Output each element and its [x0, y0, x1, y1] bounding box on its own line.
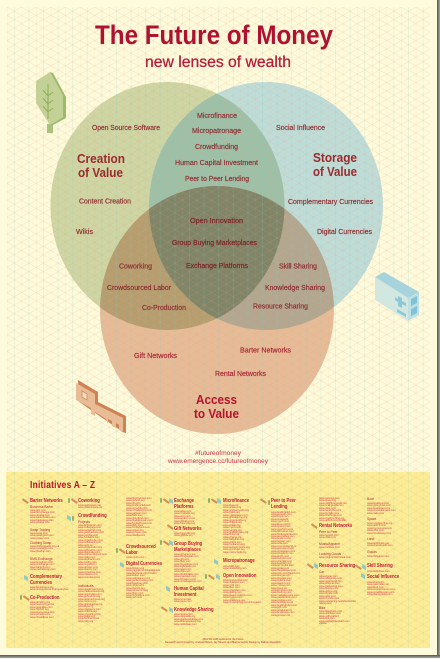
column 2: www.workspace.net www.citizenspace.us: [78, 504, 102, 509]
label: Social Influence: Social Influence: [276, 125, 325, 132]
column 3: www.mturk.com: [126, 556, 144, 559]
column 6: Peer to Peer Lending: [271, 498, 296, 510]
label: Rental Networks: Rental Networks: [215, 371, 266, 378]
footer credits: Research and Concept by: Andrew Olstein, Jay Simons and Marina Gorbis. Design by Fathom Research: [165, 641, 281, 644]
icon: leaf: [36, 72, 66, 133]
column 4: www.ebay.com www.craigslist.org www.etsy.com www.amazon.com www.alibaba.com www.freecycle.org: [174, 510, 195, 525]
column 5: Micropatronage: [223, 558, 255, 564]
column 4: Group Buying Marketplaces: [174, 541, 202, 553]
label: Complementary Currencies: Complementary Currencies: [288, 199, 373, 206]
title: The Future of Money: [95, 20, 333, 50]
venn labels: [76, 113, 373, 465]
yellow initiatives background: [6, 472, 430, 648]
website: www.emergence.cc/futureofmoney: [167, 458, 269, 465]
column 4: www.groupon.com www.livingsocial.com www.gilt.com www.tippr.com www.buywithme.com www.kgbdeals.com www.woot.com www.yipit.com www.doubletake.com www.eversave.com www.homerun.com www.crowdsavings.com: [174, 553, 202, 583]
column 3: www.bitcoin.org www.paypal.com/digitalgoods www.facebook.com/credits www.linden.com www.webmoney.com www.perfectmoney.com www.liquidpay.com www.ripple.com www.litecoin.org www.namecoin.org www.flooz.com www.hubculture.com www.ven.com: [126, 567, 160, 599]
label: Human Capital Investment: Human Capital Investment: [175, 160, 258, 167]
column 2: www.kickstarter.com www.indiegogo.com www.rockethub.com www.peerbackers.com www.pozible.com www.fundable.com www.crowdcube.com www.sellaband.com www.spot.us www.profounder.com www.gofundme.com www.wefunder.com www.startsomegood.com www.ulule.com www.appbackr.com www.fundly.com www.invested.in www.growvc.com www.seedrs.com www.crowdrise.com www.causes.com www.somolend.org: [78, 524, 107, 579]
column 7: www.bikeshare.com www.spinlister.com www.velib.paris.fr www.bixi.com www.capitalbikeshare.com citibike: [319, 610, 350, 625]
column 2: www.giveforward.com www.modestneeds.org www.givezooks.com www.gofundme.org www.donorschoose.org www.razoo.com www.globalgiving.org www.kiva.org www.causevox.com www.zidisha.org www.youcaring.com www.watsi.org www.fundrazr.com www.rally.org: [78, 588, 105, 623]
column 7: Resource Sharing: [319, 563, 355, 569]
label: Peer to Peer Lending: Peer to Peer Lending: [185, 176, 249, 183]
column 1: www.swap.com www.swapgiant.com www.swapz.com: [30, 532, 54, 540]
column 8: Boat: [367, 497, 374, 501]
label: Coworking: Coworking: [119, 264, 152, 270]
column 4: Knowledge Sharing: [174, 607, 214, 613]
label: Storage of Value: [313, 151, 357, 179]
column 2: [67, 498, 107, 623]
label: Digital Currencies: Digital Currencies: [317, 229, 372, 236]
label: Co-Production: Co-Production: [142, 305, 186, 312]
column 4: www.quora.com www.wikipedia.org www.stackexchange.com www.khanacademy.org www.skillshare.com: [174, 613, 203, 626]
label: Exchange Platforms: Exchange Platforms: [186, 263, 248, 270]
column 7: www.rockbox.com: [319, 546, 340, 549]
column 8: Social Influence: [367, 574, 399, 580]
column 1: www.clothingswap.org.uk www.swapstyle.com www.thredup.com: [30, 545, 59, 553]
column 2: Individuals: [78, 584, 94, 588]
label: Crowdsourced Labor: Crowdsourced Labor: [107, 285, 172, 292]
column 4: Human Capital Investment: [174, 586, 204, 598]
heading: Initiatives A-Z: Initiatives A – Z: [30, 480, 95, 491]
column 5: www.kiva.org www.accion.org www.grameen-info.org www.mifos.org www.microplace.com www.globalgiving.org www.opportunity.org www.zidisha.org www.wokai.org www.myc4.com www.rangde.org www.lendwithcare.org www.finca.org www.vittana.org www.babyloan.org www.unitus.com www.fundacion.org www.entrepreneurs.org www.pro-mujer.org www.microcredit.org: [223, 504, 250, 554]
label: Skill Sharing: Skill Sharing: [279, 264, 317, 270]
subtitle: new lenses of wealth: [145, 54, 291, 71]
column 3: [116, 497, 162, 599]
label: Content Creation: Content Creation: [79, 198, 131, 206]
column 5: www.innocentive.com www.nineteen.com www.yet2.com www.ideo.com www.openideo.com www.quirky.com www.ideaconnection.com www.hypios.com www.challenge.gov www.crowdspring.com/innovation: [223, 579, 261, 604]
column 1: Swap Trading: [30, 528, 50, 532]
label: Access to Value: Access: [196, 393, 237, 407]
label: Creation of Value: of Value: [78, 166, 123, 180]
column 1: www.berkshares.org www.timeproducts.org/moneyfree: [30, 586, 68, 591]
column 2: Projects: [78, 520, 90, 524]
footer credits: 2011 SR-1345 Institute for the Future: [202, 638, 244, 640]
column 6: www.lendingclub.com www.prosper.com www.zopa.com www.smava.de www.myc4.com www.kiva.org/zip www.fynanz.com www.peerform.com www.ratesetter.com www.fundingcircle.com www.auxmoney.com www.lendico.com www.upstart.com www.sofa.com www.commonbond.co www.somolend.com www.prestadero.com www.wiseclerk.com www.lendit.com www.cumplo.com www.yirendai.com www.tuandai.com www.renrendai.com www.ppdai.com www.friendsclear.com www.communitylend.com www.wonga.com www.thincats.com www.zidisha.com www.assetz.com www.mintos.com www.twino.eu www.bondora.com www.funding.com www.marketinvoice.com www.capitalcircle.com www.ezubao.com www.landbay.co.uk www.lendingrobot.com www.yqb.com www.pretdunion.fr www.lendinvest.com www.prosper.net: [271, 510, 300, 617]
label: Microfinance: Microfinance: [197, 113, 237, 120]
column 8: Goods: [367, 550, 377, 554]
column 8: Land: [367, 537, 374, 541]
label: Creation of Value: Creation: [77, 152, 125, 166]
label: Creation of Value: [77, 152, 125, 180]
column 5: Open Innovation: [223, 573, 256, 579]
column 4: www.freecycle.org www.giftflow.org: [174, 532, 195, 537]
column 1: www.itex.com www.bizxchange.com www.ubarter.com www.barterbucks.com www.tradeaway.com www.ebarter.com: [30, 509, 55, 524]
column 4: [160, 498, 214, 626]
column 7: Car: [319, 570, 324, 574]
column 8: www.couchsurfing.org www.airbnb.com www.roomorama.com www.vrbo.com www.homeaway.com: [367, 522, 392, 535]
column 2: Coworking: [78, 498, 100, 504]
column 7: [307, 497, 356, 625]
column 3: Digital Currencies: [126, 561, 162, 567]
column 1: SMS Exchange: [30, 557, 53, 561]
column 7: Peer to Peer: [319, 530, 338, 534]
label: Barter Networks: Barter Networks: [240, 348, 291, 354]
label: Access to Value: to Value: [194, 407, 239, 421]
venn diagram: [50, 82, 383, 434]
column 3: www.ifundwomen.com www.gofund.org www.tilt.com www.lendingclub.com www.crowdtilt.com www.crowdsupply.com www.patreon.com www.flattr.com www.plumfund.com www.pledgemusic.com www.fundedbyme.com www.tiltify.com www.honeyfund.com www.zopa.com www.prosper.com www.dwolla.com: [126, 497, 152, 537]
label: Knowledge Sharing: Knowledge Sharing: [265, 285, 325, 292]
label: Open Innovation: Open Innovation: [190, 218, 243, 225]
label: Resource Sharing: Resource Sharing: [253, 304, 308, 310]
column 8: www.klout.com www.peerindex.net www.kred.com www.empireavenue.com www.crowdbooster.com www.tweetgrader.com: [367, 581, 395, 596]
column 1: Complementary Currencies: [30, 574, 62, 586]
column 2: Crowdfunding: [78, 513, 107, 519]
column 8: Space: [367, 517, 376, 521]
column 7: www.pawngo.com www.uloop.org www.neighborgoods.net www.snapgoods.com www.zilok.com www.rentcycle.com www.rentalic.com www.hirethings.com www.couchsurfing.org www.airbnb.com/rentals: [319, 497, 347, 522]
label: Group Buying Marketplaces: Group Buying Marketplaces: [172, 240, 257, 247]
hashtag: #futureofmoney: [195, 450, 242, 457]
column 5: [205, 498, 262, 604]
column 5: Microfinance: [223, 498, 249, 504]
label: Wikis: Wikis: [76, 229, 94, 236]
label: Open Source Software: Open Source Software: [92, 125, 160, 132]
column 7: Bike: [319, 606, 325, 610]
label: Storage of Value: of Value: [313, 165, 357, 179]
column 1: www.smsdirect.com www.txtxchange.com www.barterly.com www.mobileswap.com: [30, 561, 56, 571]
label: Access to Value: [194, 393, 239, 421]
column 7: www.rentoid.com www.zilok.com: [319, 534, 339, 539]
column 7: Looking Goods: [319, 552, 341, 556]
label: Micropatronage: Micropatronage: [192, 128, 241, 135]
column 1: Business Barter: [30, 505, 53, 509]
column 4: www.lumni.net www.pave.com: [174, 598, 191, 603]
column 1: Co-Production: [30, 595, 59, 601]
column 1: Barter Networks: [30, 498, 63, 504]
column 8: [355, 497, 400, 596]
column 8: www.landshare.net www.sharedearth.com: [367, 542, 393, 547]
column 8: www.skillshare.com: [367, 570, 390, 573]
icon: key: [76, 380, 126, 433]
column 4: Exchange Platforms: [174, 498, 194, 510]
label: Gift Networks: Gift Networks: [134, 353, 178, 360]
column 6: [260, 498, 300, 617]
column 5: www.flattr.com www.readability.com: [223, 565, 246, 570]
column 7: Music/Apparel: [319, 542, 340, 546]
column 7: www.bagborroworsteal.com: [319, 556, 351, 559]
column 8: www.boatbound.co www.getmyboat.com www.boatsetter.com www.cruiseplanners.com www.sailo.com: [367, 502, 396, 515]
column 1: [20, 498, 68, 619]
column 3: Crowdsourced Labor: [126, 544, 156, 556]
footer credits: [165, 638, 281, 644]
label: Storage of Value: Storage: [313, 151, 357, 165]
column 4: Gift Networks: [174, 526, 202, 532]
column 7: Rental Networks: [319, 523, 352, 529]
column 7: www.zipcar.com www.relayrides.com www.getaround.com www.whipcar.com www.carpooling.com www.flexcar.com www.goloco.org www.nuride.com www.uber.com www.zimride.com www.carsharing.net/where/index ridejoy.com: [319, 575, 356, 605]
column 1: Clothing Swap: [30, 541, 51, 545]
icon: storage cabinet: [375, 272, 419, 321]
column 8: Skill Sharing: [367, 563, 393, 569]
column 8: www.thingloop.com: [367, 555, 389, 558]
label: Crowdfunding: Crowdfunding: [195, 144, 238, 151]
column 1: www.dimdim.com www.sourceforge.net www.openideo.com www.fabhub.org www.innocentive.com www.ponoko.com www.threadless.com: [30, 601, 55, 619]
